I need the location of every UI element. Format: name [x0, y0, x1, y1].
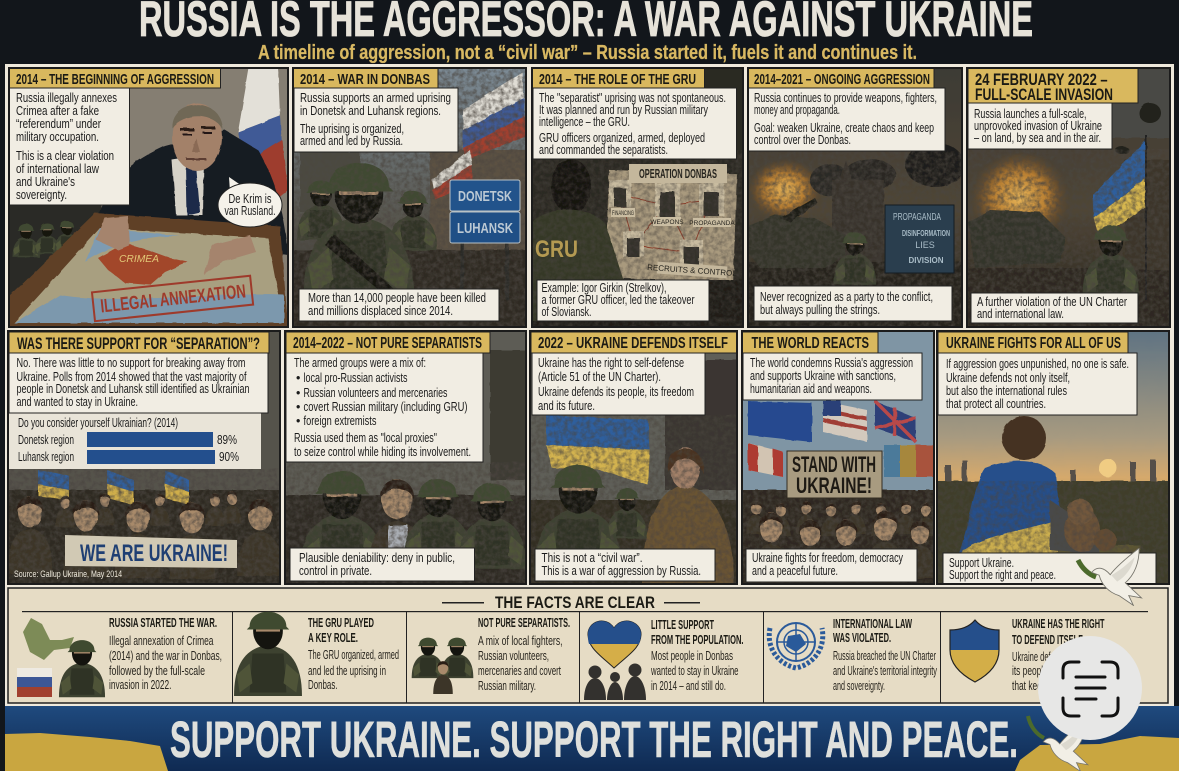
heading: [294, 68, 438, 88]
heading: 2014–2021 – ONGOING AGGRESSION: [754, 71, 930, 88]
speech bubble: De Krim is: [228, 192, 272, 206]
text block: foreign extremists: [304, 414, 376, 428]
propaganda sign: DISINFORMATION: [902, 229, 950, 238]
heading: [531, 332, 737, 353]
heading: 2014–2022 – NOT PURE SEPARATISTS: [293, 335, 482, 352]
caption: and a peaceful future.: [752, 564, 838, 578]
fact 4: little support from the population: in 2014 – and still do.: [651, 679, 726, 693]
text block: The "separatist" uprising was not spontaneous.: [539, 91, 726, 105]
illustration: leader pointing at map of Crimea: [9, 68, 288, 327]
caption: [746, 549, 917, 582]
text block: [294, 88, 458, 152]
heading: [748, 68, 934, 88]
icon: group of fighters: [412, 638, 473, 694]
panel: Ukraine fights for all of us: [937, 331, 1169, 584]
bar chart: Ukrainian identity: 90%: [219, 450, 239, 464]
caption: Never recognized as a party to the conflict,: [760, 290, 933, 304]
bar chart: Ukrainian identity: Donetsk region: [18, 433, 74, 447]
fact 1: Russia started the war: RUSSIA STARTED THE WAR.: [109, 616, 217, 630]
text block: •: [296, 414, 300, 428]
fact 2: the GRU played a key role: THE GRU PLAYED: [308, 616, 374, 630]
fact 2: the GRU played a key role: A KEY ROLE.: [308, 631, 358, 645]
caption: control in private.: [299, 564, 372, 578]
heading: the facts are clear: THE FACTS ARE CLEAR: [495, 593, 655, 612]
propaganda sign: PROPAGANDA: [893, 211, 941, 223]
text block: Russia supports an armed uprising: [300, 91, 451, 105]
map label: Crimea: CRIMEA: [119, 253, 159, 265]
panel: 24 February 2022 full-scale invasion: [967, 68, 1170, 327]
caption: A further violation of the UN Charter: [977, 295, 1127, 309]
dove with olive branch: [1078, 548, 1142, 605]
text block: This is a clear violation: [16, 149, 114, 163]
text block: The armed groups were a mix of:: [294, 356, 426, 370]
footer dove: [1028, 716, 1088, 771]
text block: [938, 353, 1137, 415]
caption: [535, 549, 715, 581]
heading: 2014 – WAR IN DONBAS: [300, 71, 430, 88]
text block: people in Donetsk and Luhansk still identified as Ukrainian: [16, 382, 250, 396]
panel: was there support for separation: [7, 331, 283, 584]
text block: Russian volunteers and mercenaries: [304, 386, 448, 400]
heading: 2014 – THE ROLE OF THE GRU: [539, 71, 696, 88]
illustration: soldiers on ruined street: [293, 68, 526, 327]
text block: but also the international rules: [946, 384, 1067, 398]
board labels: OPERATION DONBAS: [639, 167, 717, 181]
text block: humanitarian aid and weapons.: [750, 382, 872, 396]
text block: unprovoked invasion of Ukraine: [974, 119, 1102, 133]
caption: [537, 280, 709, 321]
caption: More than 14,000 people have been killed: [308, 291, 486, 305]
caption: Ukraine fights for freedom, democracy: [752, 551, 904, 565]
sign: stand with Ukraine: [787, 451, 882, 498]
text block: armed and led by Russia.: [300, 134, 403, 148]
text block: sovereignty.: [16, 188, 67, 202]
text block: that protect all countries.: [946, 397, 1046, 411]
caption: of Sloviansk.: [542, 305, 592, 319]
illustration: child in flag facing sunset: [937, 331, 1169, 584]
panel: 2014 the beginning of aggression: [9, 68, 288, 327]
text block: Ukraine has the right to self-defense: [538, 356, 684, 370]
fact 2: the GRU played a key role: [234, 612, 399, 696]
text block: and wanted to stay in Ukraine.: [16, 395, 138, 409]
board labels: WEAPONS: [650, 219, 684, 226]
caption: a former GRU officer, led the takeover: [542, 293, 694, 307]
heading: 24 FEBRUARY 2022 –: [975, 70, 1108, 89]
fact 6: Ukraine has the right to defend itself: Ukraine defends: [1012, 650, 1067, 664]
yellow brush strokes: [5, 733, 1179, 771]
text block: •: [296, 386, 300, 400]
caption: This is not a “civil war”.: [542, 551, 642, 565]
text block: covert Russian military (including GRU): [304, 400, 468, 414]
text block: “referendum” under: [16, 117, 101, 131]
caption: [299, 289, 499, 321]
caption: Example: Igor Girkin (Strelkov),: [542, 281, 666, 295]
heading: [9, 332, 269, 353]
caption: but always pulling the strings.: [760, 303, 880, 317]
fact 6: Ukraine has the right to defend itself: TO DEFEND ITSELF.: [1012, 633, 1084, 647]
heading: THE WORLD REACTS: [752, 335, 869, 352]
sign: stand with Ukraine: STAND WITH: [792, 452, 876, 477]
propaganda sign: [885, 205, 954, 273]
fact 3: not pure separatists: Russian military.: [478, 679, 536, 693]
fact 4: little support from the population: Most people in Donbas: [651, 649, 733, 663]
fact 5: international law was violated: WAS VIOLATED.: [833, 631, 891, 645]
heading: [286, 332, 490, 353]
heading: 2014 – THE BEGINNING OF AGGRESSION: [16, 71, 214, 88]
icon: scan text: [1063, 662, 1118, 716]
heading: [10, 68, 220, 88]
heading: 2022 – UKRAINE DEFENDS ITSELF: [538, 335, 728, 352]
board labels: RECRUITS & CONTROL: [647, 263, 738, 278]
board labels: [611, 164, 738, 278]
text block: Russia illegally annexes: [16, 91, 117, 105]
text block: [10, 88, 130, 205]
panel: the world reacts: [742, 331, 937, 586]
text block: •: [296, 400, 300, 414]
text block: The world condemns Russia's aggression: [750, 356, 913, 370]
text block: Russia launches a full-scale,: [974, 107, 1086, 121]
road signs: DONETSK: [458, 188, 512, 205]
text block: •: [296, 371, 300, 385]
panel: the facts are clear: [8, 588, 1168, 703]
illustration: crowd with Ukrainian flags: [7, 331, 283, 584]
text block: [743, 353, 922, 400]
propaganda sign: LIES: [915, 240, 935, 250]
text block: [286, 353, 483, 462]
icon: Crimea map, flag and soldier: [17, 618, 105, 697]
text block: It was planned and run by Russian military: [539, 103, 709, 117]
fact 5: international law was violated: and Ukraine's territorial integrity: [833, 664, 937, 678]
heading: WAS THERE SUPPORT FOR “SEPARATION”?: [17, 335, 260, 353]
caption: [290, 548, 474, 581]
bar chart: Ukrainian identity: [9, 413, 261, 469]
fact 6: Ukraine has the right to defend itself: its people and: [1012, 664, 1064, 678]
footer banner: [0, 706, 1179, 771]
bar chart: Ukrainian identity: Do you consider yourself Ukrainian? (2014): [18, 416, 178, 430]
panel: 2022 Ukraine defends itself: [530, 331, 737, 584]
text block: intelligence – the GRU.: [539, 115, 630, 129]
text block: military occupation.: [16, 130, 99, 144]
fact 1: Russia started the war: Illegal annexation of Crimea: [109, 634, 214, 648]
text block: Ukraine defends not only itself,: [946, 371, 1070, 385]
jacket label GRU: GRU: [535, 236, 578, 263]
heading: FULL-SCALE INVASION: [975, 85, 1113, 104]
text block: and supports Ukraine with sanctions,: [750, 369, 896, 383]
text block: – on land, by sea and in the air.: [974, 131, 1101, 145]
fact 4: little support from the population: FROM THE POPULATION.: [651, 633, 744, 647]
text block: to seize control while hiding its involvement.: [294, 445, 471, 459]
caption: Plausible deniability: deny in public,: [299, 551, 455, 565]
caption: Support Ukraine.: [949, 556, 1014, 570]
text block: Russia used them as "local proxies": [294, 431, 437, 445]
fact 3: not pure separatists: A mix of local fighters,: [478, 634, 563, 648]
text block: [532, 353, 705, 415]
icon: masked soldier: [234, 612, 302, 696]
heading: [968, 68, 1138, 104]
fact 1: Russia started the war: (2014) and the war in Donbas,: [109, 649, 222, 663]
text block: Goal: weaken Ukraine, create chaos and keep: [754, 121, 934, 135]
fact 2: the GRU played a key role: Donbas.: [308, 678, 338, 692]
subtitle: A timeline of aggression, not a “civil war” – Russia started it, fuels it and continues it.: [258, 42, 917, 64]
text block: Russia continues to provide weapons, fighters,: [754, 91, 937, 105]
board labels: FINANCING: [612, 210, 634, 217]
scan button overlay: [1038, 636, 1142, 740]
panel: 2014-2022 not pure separatists: [285, 331, 527, 584]
panel: 2014 war in Donbas: [293, 68, 526, 327]
bar chart: Ukrainian identity: 89%: [217, 433, 237, 447]
text block: local pro-Russian activists: [304, 371, 408, 385]
icon: UN emblem: [769, 623, 823, 668]
speech bubble: [218, 177, 282, 227]
text block: Ukraine. Polls from 2014 showed that the vast majority of: [16, 370, 247, 384]
illustration: flags and crowd: [742, 331, 937, 586]
text block: and Ukraine's: [16, 175, 75, 189]
banner: we are Ukraine: WE ARE UKRAINE!: [80, 540, 228, 567]
fact 3: not pure separatists: mercenaries and covert: [478, 664, 561, 678]
road signs: [450, 180, 520, 243]
text block: money and propaganda.: [754, 103, 840, 117]
fact 3: not pure separatists: Russian volunteers,: [478, 649, 549, 663]
caption: and millions displaced since 2014.: [308, 304, 453, 318]
stamp: illegal annexation: [92, 276, 253, 321]
text block: Crimea after a fake: [16, 104, 99, 118]
fact 1: Russia started the war: followed by the full-scale: [109, 664, 205, 678]
fact 6: Ukraine has the right to defend itself: UKRAINE HAS THE RIGHT: [1012, 617, 1105, 631]
caption: This is a war of aggression by Russia.: [542, 564, 701, 578]
text block: [968, 103, 1112, 149]
heading: [532, 68, 704, 88]
bar chart: Ukrainian identity: Luhansk region: [18, 450, 74, 464]
fact 5: international law was violated: INTERNATIONAL LAW: [833, 617, 912, 631]
text block: The uprising is organized,: [300, 122, 404, 136]
panel: 2014 the role of the GRU: [532, 68, 743, 327]
icon: shield: [950, 620, 999, 682]
fact 1: Russia started the war: [17, 616, 222, 697]
board labels: PROPAGANDA: [689, 220, 735, 227]
heading: [938, 332, 1128, 353]
text block: in Donetsk and Luhansk regions.: [300, 104, 441, 118]
caption: [971, 293, 1138, 323]
illustration: defenders and flag: [530, 331, 737, 584]
fact 4: little support from the population: LITTLE SUPPORT: [651, 618, 714, 632]
panel: 2014-2021 ongoing aggression: [747, 68, 965, 327]
text block: [533, 88, 736, 159]
fact 1: Russia started the war: invasion in 2022.: [109, 678, 172, 692]
text block: and commanded the separatists.: [539, 143, 668, 157]
fact 6: Ukraine has the right to defend itself: that keeps us: [1012, 679, 1062, 693]
text block: control over the Donbas.: [754, 133, 851, 147]
text block: of international law: [16, 162, 100, 176]
fact 5: international law was violated: and sovereignty.: [833, 679, 885, 693]
fact 3: not pure separatists: [412, 616, 570, 694]
fact 4: little support from the population: [584, 618, 744, 700]
text block: Ukraine defends its people, its freedom: [538, 385, 694, 399]
text block: No. There was little to no support for breaking away from: [16, 356, 246, 370]
illustration: armed group among ruins: [285, 331, 527, 584]
icon: Ukrainian heart and people: [584, 621, 646, 700]
caption: and international law.: [977, 307, 1064, 321]
speech bubble: van Rusland.: [224, 204, 276, 218]
sign: stand with Ukraine: UKRAINE!: [796, 473, 872, 498]
caption: [754, 286, 952, 321]
stamp: illegal annexation: ILLEGAL ANNEXATION: [99, 281, 247, 317]
road signs: LUHANSK: [457, 220, 513, 237]
caption: Support the right and peace.: [949, 568, 1056, 582]
fact 6: Ukraine has the right to defend itself: [950, 617, 1105, 693]
fact 5: international law was violated: Russia breached the UN Charter: [833, 649, 936, 663]
illustration: GRU officer at operation board: [532, 68, 743, 327]
fact 5: international law was violated: [769, 617, 937, 693]
source note: Source: Gallup Ukraine, May 2014: [14, 569, 122, 580]
text block: GRU officers organized, armed, deployed: [539, 131, 705, 145]
fact 2: the GRU played a key role: The GRU organized, armed: [308, 648, 399, 662]
heading: [742, 332, 878, 353]
illustration: tank, helicopters and flag: [967, 68, 1170, 327]
banner: we are Ukraine: [65, 535, 237, 568]
propaganda sign: DIVISION: [908, 256, 944, 265]
fact 3: not pure separatists: NOT PURE SEPARATISTS.: [478, 616, 570, 630]
caption: [943, 553, 1156, 584]
fact 4: little support from the population: wanted to stay in Ukraine: [650, 664, 739, 678]
text block: and its future.: [538, 399, 595, 413]
fact 2: the GRU played a key role: and led the uprising in: [308, 664, 386, 678]
text block: [9, 353, 268, 413]
text block: [748, 88, 945, 151]
illustration: burning city and tank: [747, 68, 965, 327]
text block: (Article 51 of the UN Charter).: [538, 370, 661, 384]
